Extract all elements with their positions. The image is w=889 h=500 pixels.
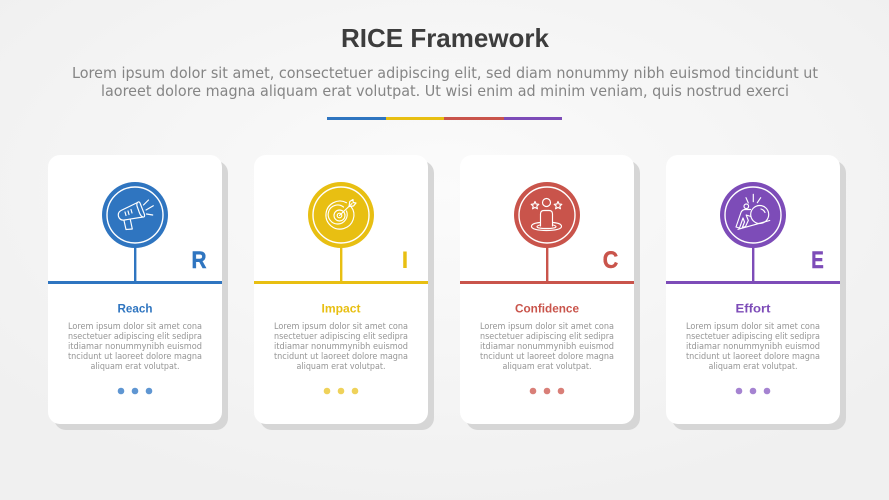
body text: Reach: nsectetuer adipiscing elit sedipra <box>68 331 202 341</box>
letter I: I <box>402 247 408 274</box>
body text: Effort: Lorem ipsum dolor sit amet cona <box>686 321 820 331</box>
dots: Effort <box>736 388 770 394</box>
subtitle text <box>72 64 818 100</box>
icon: person pushing boulder <box>736 194 770 229</box>
heading: Confidence: Confidence <box>515 302 579 316</box>
panel: Effort <box>666 155 846 430</box>
panel: Reach <box>48 155 228 430</box>
body text: Reach: itdiamar nonummynibh euismod <box>68 341 202 351</box>
subtitle text: Lorem ipsum dolor sit amet, consectetuer adipiscing elit, sed diam nonummy nibh euismod tincidunt ut <box>72 64 818 82</box>
body text: Reach: Lorem ipsum dolor sit amet cona <box>68 321 202 331</box>
body text: Effort: aliquam erat volutpat. <box>708 361 798 371</box>
title: RICE Framework <box>341 23 550 53</box>
body text: Effort <box>686 321 820 371</box>
body text: Confidence: nsectetuer adipiscing elit sedipra <box>480 331 614 341</box>
icon: person with stars <box>531 198 562 230</box>
heading: Reach: Reach <box>118 302 152 316</box>
subtitle text: laoreet dolore magna aliquam erat volutpat. Ut wisi enim ad minim veniam, quis nostrud exerci <box>101 82 789 100</box>
body text: Effort: tncidunt ut laoreet dolore magna <box>686 351 820 361</box>
body text: Effort: nsectetuer adipiscing elit sedipra <box>686 331 820 341</box>
body text: Impact: tncidunt ut laoreet dolore magna <box>274 351 408 361</box>
body text: Confidence: tncidunt ut laoreet dolore magna <box>480 351 614 361</box>
icon: target <box>326 200 356 229</box>
body text: Impact <box>274 321 408 371</box>
heading: Impact: Impact <box>322 302 360 316</box>
panel: Confidence <box>460 155 640 430</box>
icon: megaphone <box>118 200 153 230</box>
body text: Reach: aliquam erat volutpat. <box>90 361 180 371</box>
body text: Confidence <box>480 321 614 371</box>
panel: Impact <box>254 155 434 430</box>
letter E: E <box>811 247 824 274</box>
four-colour divider bar <box>327 117 562 120</box>
heading: Effort: Effort <box>736 302 770 316</box>
letter C: C <box>603 247 618 274</box>
body text: Impact: nsectetuer adipiscing elit sedipra <box>274 331 408 341</box>
body text: Confidence: itdiamar nonummynibh euismod <box>480 341 614 351</box>
letter R: R <box>192 247 206 274</box>
body text: Impact: Lorem ipsum dolor sit amet cona <box>274 321 408 331</box>
body text: Impact: aliquam erat volutpat. <box>296 361 386 371</box>
body text: Reach: tncidunt ut laoreet dolore magna <box>68 351 202 361</box>
body text: Effort: itdiamar nonummynibh euismod <box>686 341 820 351</box>
body text: Confidence: Lorem ipsum dolor sit amet cona <box>480 321 614 331</box>
dots: Impact <box>324 388 358 394</box>
dots: Reach <box>118 388 152 394</box>
body text: Impact: itdiamar nonummynibh euismod <box>274 341 408 351</box>
dots: Confidence <box>530 388 564 394</box>
body text: Confidence: aliquam erat volutpat. <box>502 361 592 371</box>
body text: Reach <box>68 321 202 371</box>
